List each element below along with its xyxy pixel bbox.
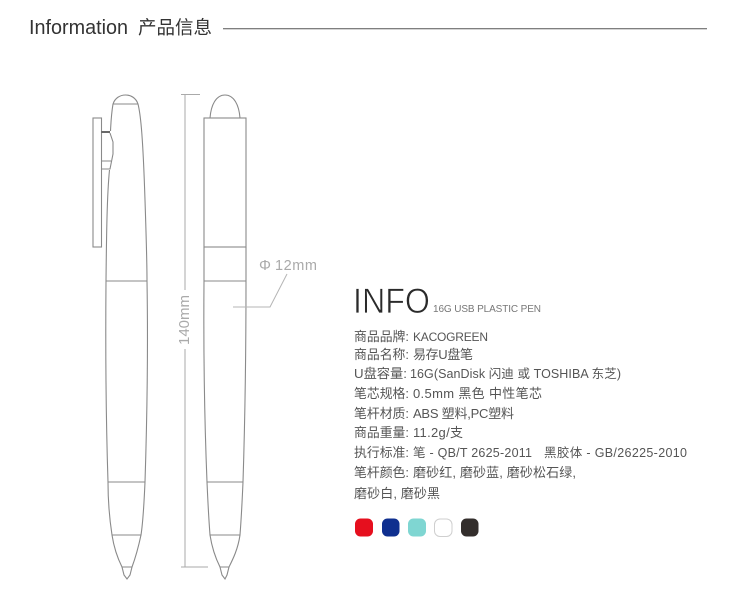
spec list: 16G(SanDisk 闪迪 或 TOSHIBA 东芝) [410, 366, 621, 381]
title [29, 17, 212, 39]
diameter label: 12mm [275, 258, 317, 274]
clip connector [102, 133, 113, 169]
cap [204, 118, 246, 247]
info panel [353, 282, 687, 536]
spec list: 笔杆材质: [354, 406, 409, 421]
spec list: 11.2g/支 [413, 425, 463, 440]
title: 产品信息 [138, 17, 212, 38]
diameter callout [233, 257, 317, 307]
spec list: 执行标准: [354, 445, 409, 460]
dome top [210, 95, 240, 118]
spec list: 磨砂白, 磨砂黑 [354, 486, 440, 501]
title: Information [29, 17, 128, 39]
spec list: U盘容量: [354, 366, 407, 381]
pen lower body outline [204, 247, 246, 579]
pen side view with clip [93, 95, 147, 579]
clip connector dark band [102, 131, 110, 133]
info heading: INFO [353, 282, 430, 321]
spec list: 易存U盘笔 [413, 347, 473, 362]
color swatches [355, 518, 478, 536]
pen front view with cap [204, 95, 246, 579]
spec list: 笔 - QB/T 2625-2011 [413, 445, 532, 460]
spec list: 0.5mm 黑色 中性笔芯 [413, 386, 542, 401]
header [29, 17, 707, 39]
diameter label: Φ [259, 257, 271, 274]
pen bands [106, 104, 147, 567]
spec list: 笔杆颜色: [354, 465, 409, 480]
length dimension 140mm [176, 94, 208, 567]
pen bands [204, 281, 246, 567]
spec list: ABS 塑料,PC塑料 [413, 406, 514, 421]
spec list [354, 329, 687, 501]
diameter label [259, 257, 317, 274]
spec list: 商品品牌: [354, 329, 409, 344]
spec list: 黑胶体 - GB/26225-2010 [544, 445, 687, 460]
spec list: 商品重量: [354, 425, 409, 440]
pen body outline [106, 95, 147, 579]
length label: 140mm [176, 295, 193, 345]
pen clip [93, 118, 102, 247]
spec list: KACOGREEN [413, 330, 488, 344]
info subtitle: 16G USB PLASTIC PEN [433, 304, 541, 315]
spec list: 商品名称: [354, 347, 409, 362]
spec list: 笔芯规格: [354, 386, 409, 401]
spec list: 磨砂红, 磨砂蓝, 磨砂松石绿, [413, 465, 576, 480]
